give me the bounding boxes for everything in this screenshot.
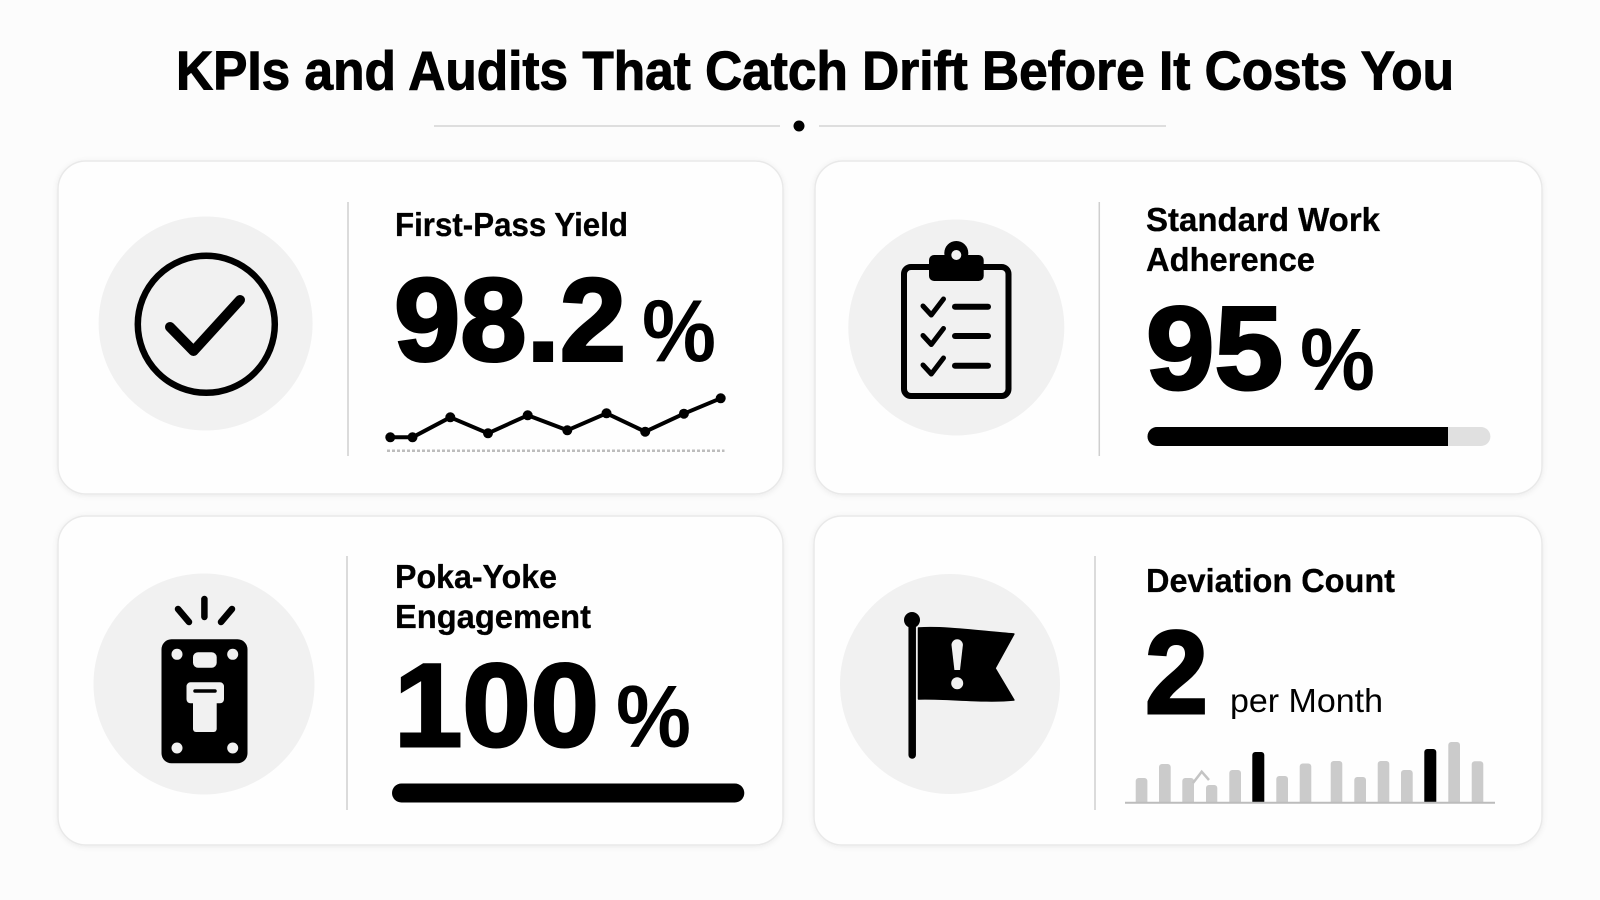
- label: Deviation Count: [1146, 562, 1395, 599]
- icon: check in circle: [99, 216, 313, 430]
- label: Engagement: [395, 598, 591, 635]
- label: [1146, 201, 1381, 278]
- value: [1145, 607, 1383, 739]
- panel: poka-yoke engagement: [58, 516, 783, 845]
- icon: clipboard: [848, 220, 1064, 436]
- panel: standard work adherence: [815, 161, 1542, 494]
- icon: poka-yoke device: [94, 574, 314, 794]
- value: %: [616, 667, 691, 766]
- progress bar: [392, 784, 744, 802]
- value: 100: [394, 640, 599, 772]
- label: First-Pass Yield: [395, 206, 628, 243]
- value: %: [642, 282, 716, 380]
- value: 95: [1146, 283, 1283, 415]
- panel: first-pass yield: [58, 161, 783, 494]
- label: [395, 558, 591, 635]
- icon: flag: [840, 574, 1060, 794]
- sparkline: [385, 393, 726, 451]
- value: %: [1300, 310, 1375, 409]
- title: KPIs and Audits That Catch Drift Before It Costs You: [176, 40, 1454, 102]
- value: [1146, 283, 1375, 415]
- bar chart: [1125, 742, 1495, 803]
- value: 2: [1145, 607, 1208, 739]
- value: 98.2: [394, 254, 626, 386]
- label: Standard Work: [1146, 201, 1381, 238]
- value: [394, 640, 691, 772]
- title divider: [434, 120, 1166, 132]
- label: Poka-Yoke: [395, 558, 557, 595]
- progress bar: [1147, 427, 1490, 446]
- panel: deviation count: [814, 516, 1542, 845]
- label: Adherence: [1146, 241, 1315, 278]
- value: per Month: [1230, 682, 1383, 719]
